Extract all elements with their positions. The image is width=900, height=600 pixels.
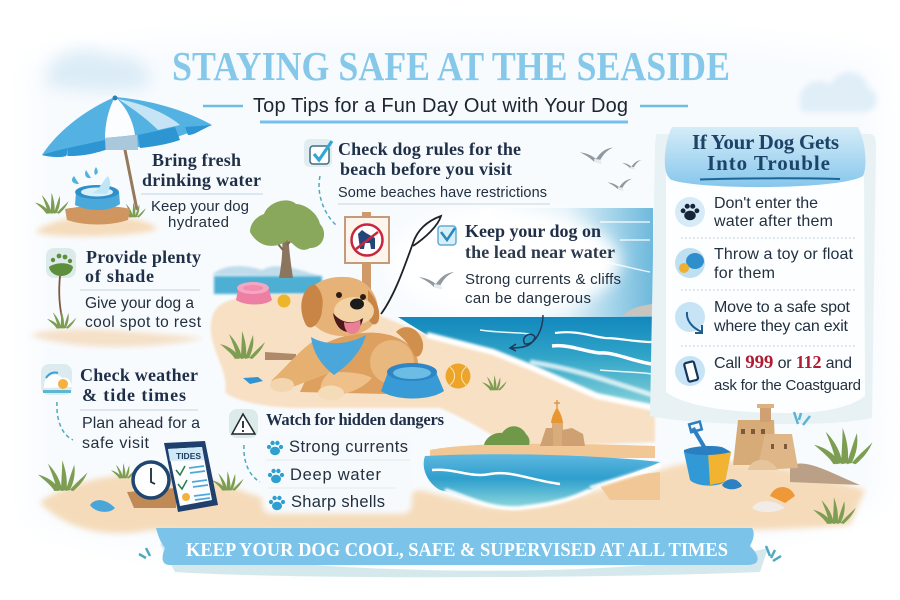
arrow: dangers — [244, 445, 260, 482]
curly arrow — [510, 315, 543, 351]
text block: provide plenty of shade — [80, 247, 202, 331]
title: STAYING SAFE AT THE SEASIDE — [172, 43, 730, 89]
text block: provide plenty of shade: Provide plenty — [86, 247, 201, 267]
text block: bring fresh drinking water: Bring fresh — [152, 150, 241, 170]
text block: check weather and tide times: safe visit — [82, 435, 150, 452]
step 4 with emergency numbers — [714, 352, 861, 394]
lower water — [424, 454, 660, 508]
text block: bring fresh drinking water — [141, 150, 263, 231]
golden retriever dog — [270, 277, 423, 400]
text block: provide plenty of shade: cool spot to rest — [85, 314, 202, 331]
panel: hidden dangers list: Strong currents — [289, 438, 408, 456]
seagulls — [419, 147, 641, 289]
step 3 — [713, 299, 851, 335]
step 1 — [713, 195, 833, 230]
far sea and hills behind tree — [212, 266, 322, 294]
step 3: Move to a safe spot — [714, 299, 851, 316]
icon: shade tree paw — [30, 248, 205, 347]
panel: hidden dangers list: Sharp shells — [291, 493, 385, 511]
text block: check weather and tide times: Check weather — [80, 365, 198, 385]
beach umbrella — [42, 96, 212, 210]
dog lead — [381, 216, 441, 314]
text block: bring fresh drinking water: Keep your dog — [151, 198, 249, 215]
step 2 — [714, 246, 854, 282]
text block: keep on the lead: Keep your dog on — [465, 221, 601, 241]
bottom sand — [40, 461, 865, 533]
text block: keep on the lead: Strong currents & cliffs — [465, 271, 621, 288]
icon: checkbox — [304, 139, 332, 167]
text block: check dog rules: Some beaches have restrictions — [338, 185, 547, 201]
text block: check weather and tide times: Plan ahead for a — [82, 415, 200, 432]
icon: warning triangle — [229, 409, 258, 438]
sky above the sea — [390, 208, 653, 318]
panel heading — [692, 130, 840, 180]
step 1: water after them — [713, 213, 833, 230]
central sand — [211, 294, 655, 448]
sea with waves — [398, 317, 653, 412]
icon: lead checkbox — [438, 226, 456, 245]
icon: toy — [675, 248, 705, 278]
tide phone and clock illustration — [38, 441, 244, 512]
lower beach strip and green bush — [430, 426, 655, 458]
text block: check weather and tide times — [80, 365, 200, 452]
arrow: weather — [57, 402, 73, 440]
tide phone and clock illustration: TIDES — [176, 451, 201, 461]
step 3: where they can exit — [713, 318, 849, 335]
text block: check dog rules: Check dog rules for the — [338, 139, 521, 159]
text block: bring fresh drinking water: hydrated — [168, 214, 229, 231]
arrow: rules to sign — [319, 176, 336, 225]
text block: keep on the lead — [465, 221, 621, 307]
step 2: Throw a toy or float — [714, 246, 854, 263]
text block: check dog rules: beach before you visit — [340, 159, 512, 179]
icon: weather — [41, 364, 72, 395]
step 4 with emergency numbers: Call 999 or 112 and — [714, 352, 852, 373]
sand castle, bucket, shells and grass — [684, 404, 872, 524]
bottom banner — [139, 528, 781, 577]
panel heading: If Your Dog Gets — [692, 130, 839, 154]
subtitle: Top Tips for a Fun Day Out with Your Dog — [253, 95, 628, 117]
bottom banner: KEEP YOUR DOG COOL, SAFE & SUPERVISED AT ALL TIMES — [186, 539, 728, 561]
icon: paw — [675, 197, 705, 227]
text block: check weather and tide times: & tide times — [82, 385, 186, 405]
icon: phone — [675, 356, 705, 386]
blue bowl and tennis ball — [381, 363, 507, 398]
small grass, stick and blue shell — [220, 331, 296, 384]
text block: check dog rules — [338, 139, 550, 204]
small sand castle — [540, 400, 585, 446]
text block: provide plenty of shade: Give your dog a — [85, 295, 194, 312]
text block: keep on the lead: can be dangerous — [465, 290, 591, 307]
icon: safe spot arrow — [675, 302, 705, 333]
subtitle — [203, 95, 688, 124]
icon: water bowl on log — [35, 167, 158, 236]
pink bowl and yellow ball — [236, 282, 290, 308]
tree — [250, 200, 324, 278]
panel: hidden dangers list: Watch for hidden dangers — [266, 410, 445, 429]
step 1: Don't enter the — [714, 195, 818, 212]
step 4 with emergency numbers: ask for the Coastguard — [714, 377, 861, 394]
panel: if your dog gets into trouble — [650, 127, 876, 424]
shoreline foam — [427, 335, 655, 408]
no dogs sign — [345, 212, 389, 290]
panel: hidden dangers list — [262, 410, 445, 514]
text block: provide plenty of shade: of shade — [85, 266, 154, 286]
text block: keep on the lead: the lead near water — [465, 242, 615, 262]
step 2: for them — [714, 265, 775, 282]
panel heading: Into Trouble — [707, 151, 830, 175]
text block: bring fresh drinking water: drinking water — [142, 170, 261, 190]
panel: hidden dangers list: Deep water — [290, 466, 382, 484]
